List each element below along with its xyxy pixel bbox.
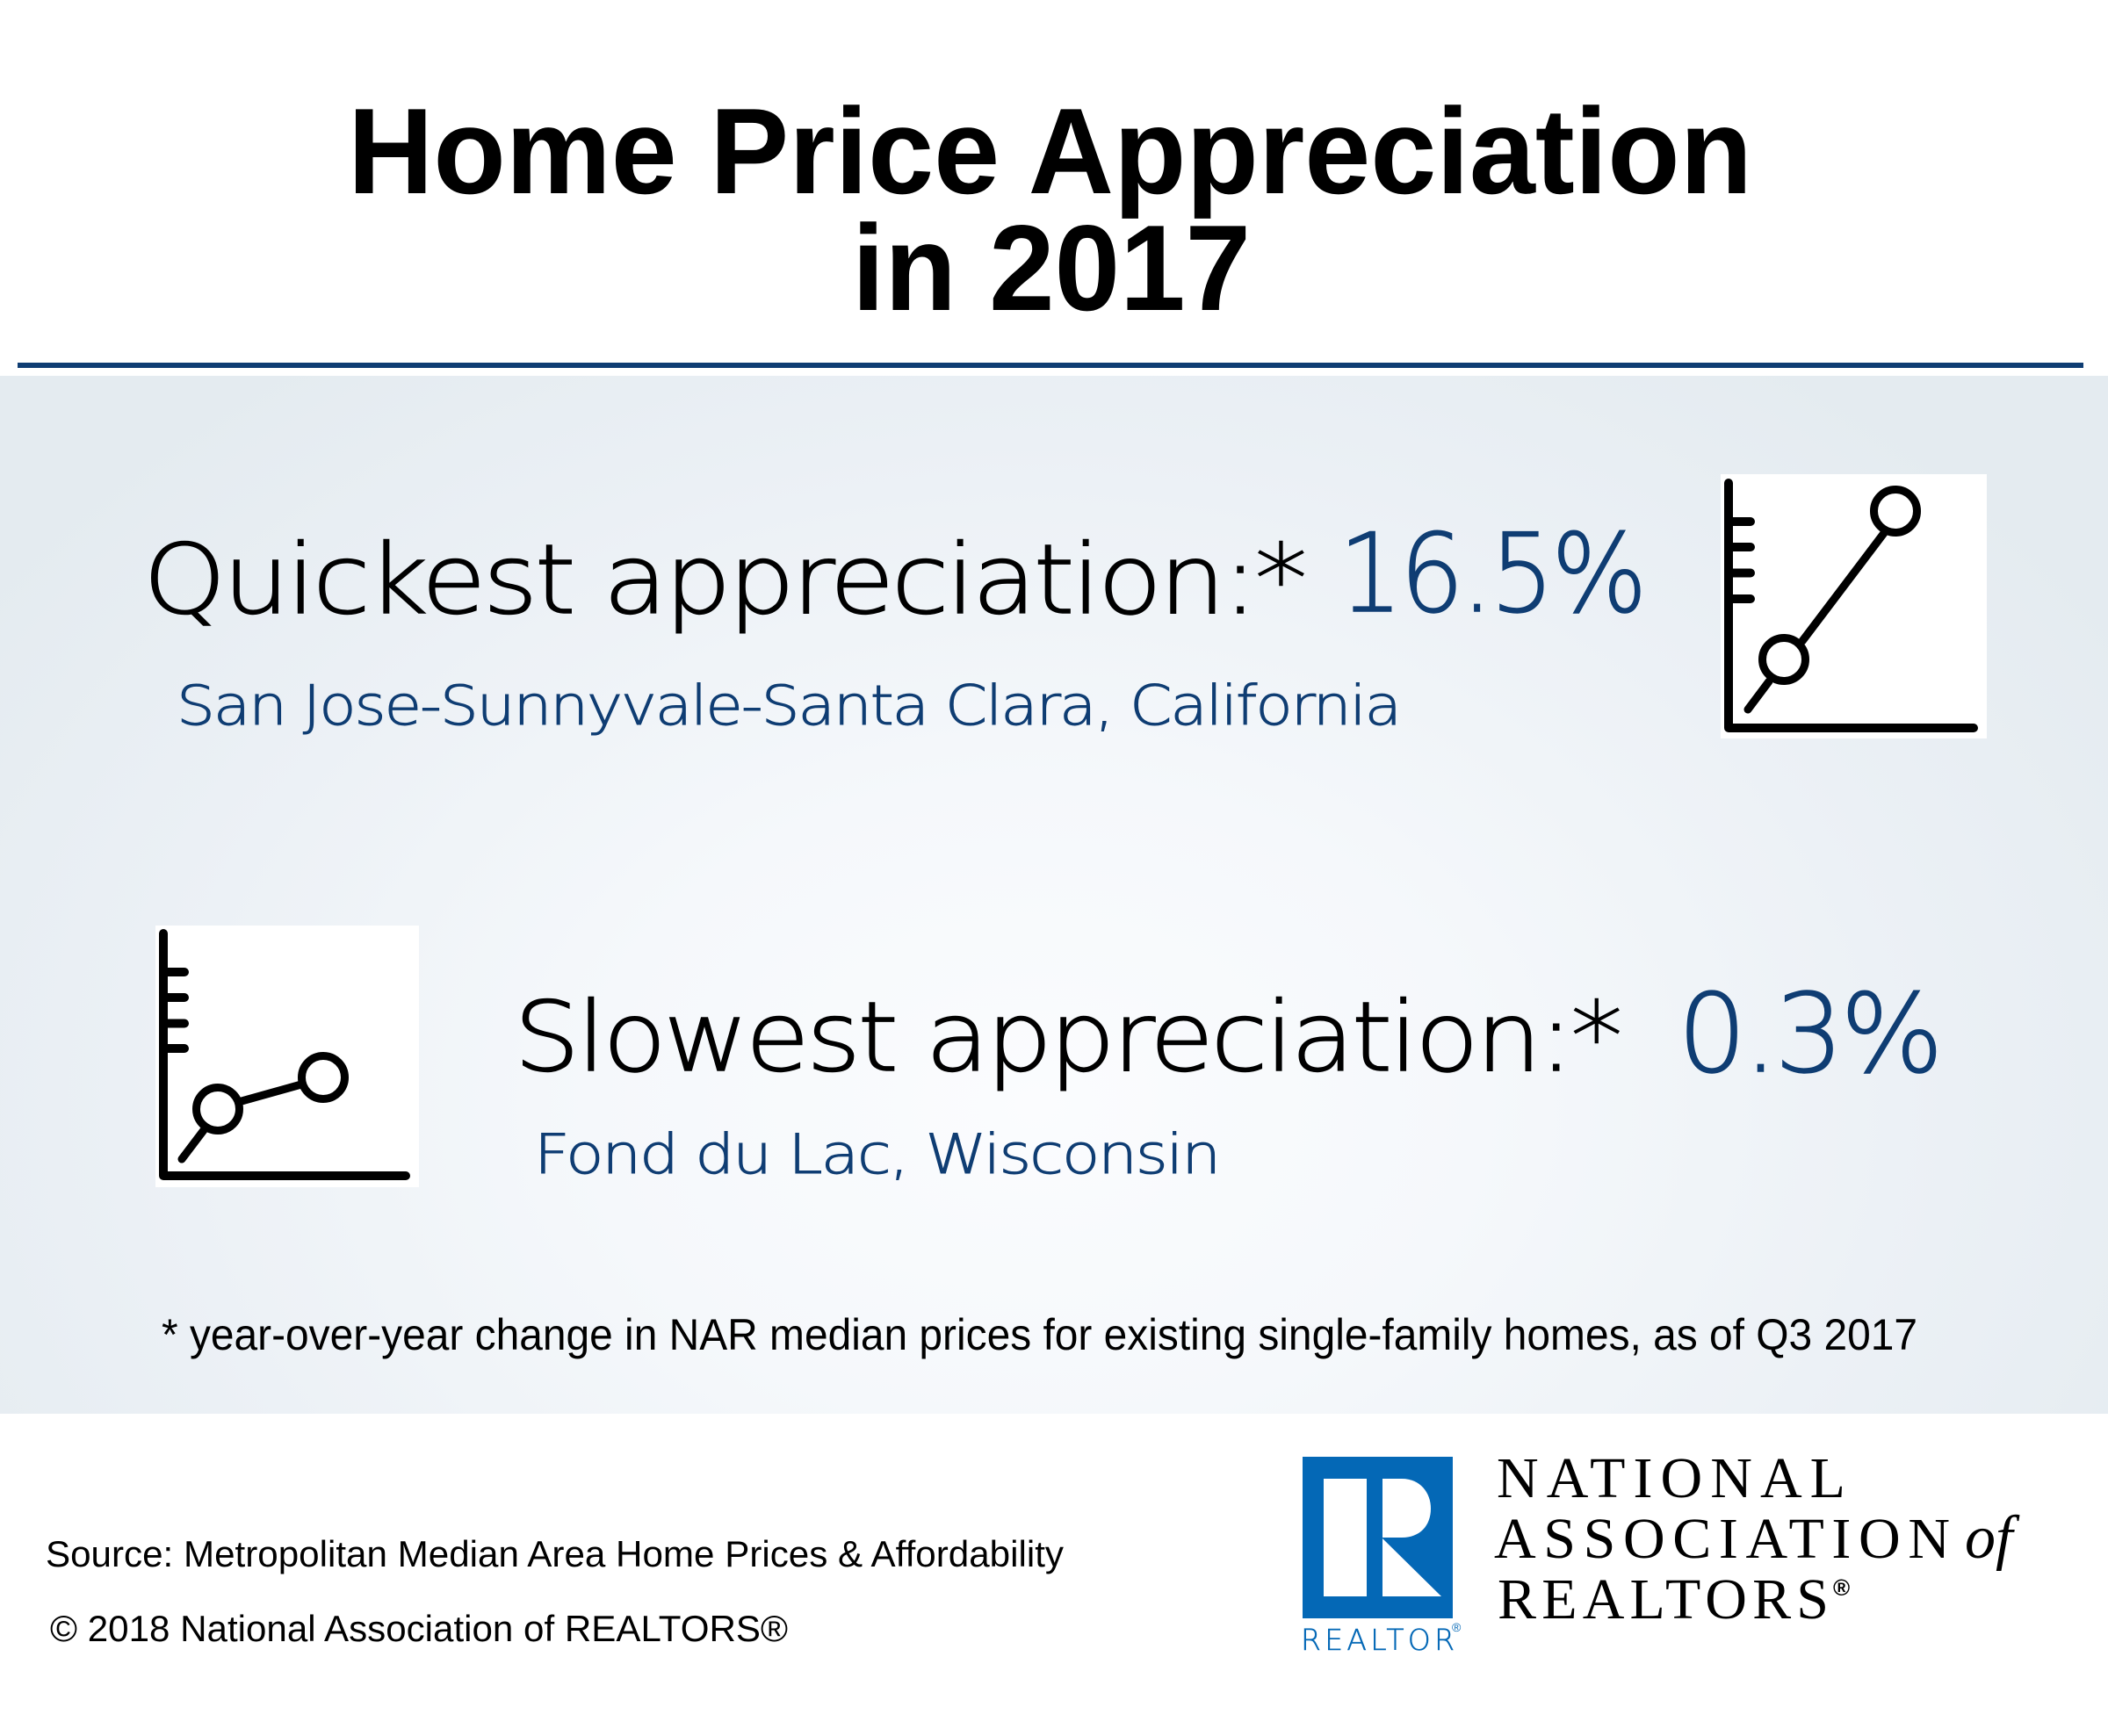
value: 16.5%: 16.5% bbox=[1339, 511, 1644, 637]
icon: shallow line chart bbox=[155, 926, 419, 1187]
title bbox=[348, 83, 1752, 336]
footnote: * year-over-year change in NAR median prices for existing single-family homes, as of Q3 2017 bbox=[162, 1310, 1917, 1359]
panel: quickest appreciation bbox=[143, 474, 1987, 738]
logo: National Association of Realtors wordmark bbox=[1494, 1446, 2020, 1632]
logo: National Association of Realtors wordmark: NATIONAL bbox=[1497, 1446, 1845, 1510]
logo: National Association of Realtors wordmark: ® bbox=[1833, 1574, 1850, 1601]
logo: National Association of Realtors wordmark: of bbox=[1965, 1504, 2020, 1572]
logo: REALTOR block R mark: REALTOR bbox=[1301, 1623, 1455, 1657]
value: 0.3%: 0.3% bbox=[1678, 971, 1940, 1098]
source line: Source: Metropolitan Median Area Home Prices & Affordability bbox=[46, 1533, 1064, 1574]
logo: REALTOR block R mark: ® bbox=[1452, 1620, 1462, 1634]
title: Home Price Appreciation bbox=[348, 83, 1752, 220]
panel: light blue gradient background bbox=[0, 376, 2108, 1414]
title: in 2017 bbox=[852, 200, 1251, 336]
heading: slowest appreciation: Slowest appreciation:* bbox=[514, 981, 1620, 1093]
logo: National Association of Realtors wordmark: ASSOCIATION bbox=[1494, 1507, 1950, 1571]
location: San Jose: San Jose-Sunnyvale-Santa Clara, California bbox=[177, 674, 1400, 738]
heading: quickest appreciation: Quickest appreciation:* bbox=[143, 523, 1304, 636]
logo: National Association of Realtors wordmark: REALTORS bbox=[1498, 1567, 1829, 1632]
icon: steep line chart bbox=[1721, 474, 1987, 738]
location: Fond du Lac: Fond du Lac, Wisconsin bbox=[534, 1122, 1219, 1186]
logo: REALTOR block R mark bbox=[1301, 1457, 1462, 1657]
copyright line: © 2018 National Association of REALTORS® bbox=[50, 1608, 788, 1649]
panel: slowest appreciation bbox=[155, 926, 1940, 1187]
